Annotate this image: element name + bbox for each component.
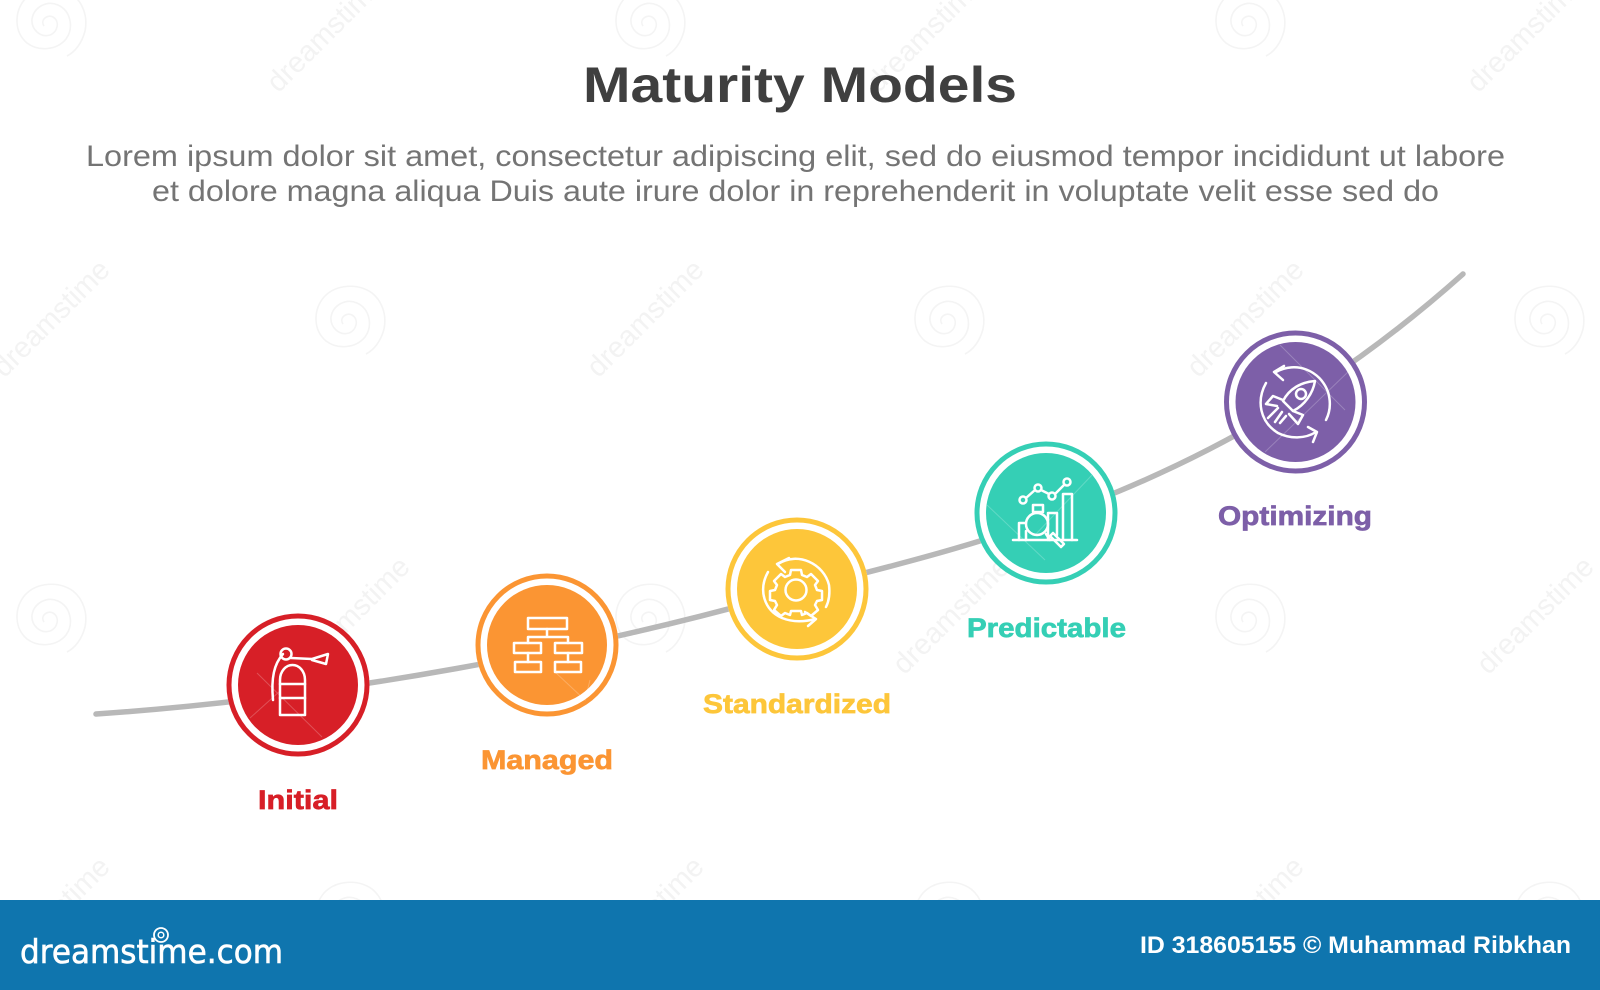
watermark pattern: dreamstime [1471, 551, 1600, 681]
footer bar [0, 900, 1600, 990]
subtitle text: Lorem ipsum dolor sit amet, consectetur adipiscing elit, sed do eiusmod tempor incididunt ut labore [86, 140, 1505, 173]
title: Maturity Models [583, 57, 1017, 113]
step 2: Managed [476, 574, 618, 775]
label: Predictable: Predictable [967, 613, 1126, 643]
step 3: Standardized [703, 518, 891, 719]
label: Standardized: Standardized [703, 689, 891, 719]
step 5: Optimizing [1218, 330, 1372, 531]
step 4: Predictable [967, 442, 1126, 643]
label: Optimizing: Optimizing [1218, 501, 1372, 531]
label: Initial: Initial [258, 785, 338, 815]
watermark pattern: dreamstime [581, 851, 711, 981]
watermark pattern: dreamstime [887, 551, 1017, 681]
watermark pattern: dreamstime [1181, 254, 1311, 384]
watermark pattern: dreamstime [581, 254, 711, 384]
icon: rocket with cycle arrows [1261, 366, 1330, 442]
subtitle text: et dolore magna aliqua Duis aute irure dolor in reprehenderit in voluptate velit esse sed do [152, 175, 1439, 208]
footer credit: ID 318605155 © Muhammad Ribkhan [1140, 932, 1571, 959]
step 1: Initial [226, 614, 370, 815]
footer logo: dreamstime.com: dreamstime.com [20, 932, 283, 971]
icon: chart with magnifier [1013, 478, 1077, 547]
curve line [96, 274, 1463, 714]
watermark pattern: dreamstime [1181, 851, 1311, 981]
label: Managed: Managed [481, 745, 613, 775]
icon: gear with cycle arrows [763, 558, 829, 626]
icon: org chart [514, 618, 582, 672]
watermark pattern: dreamstime [287, 551, 417, 681]
icon: fire extinguisher [272, 648, 328, 715]
subtitle text [86, 140, 1505, 208]
